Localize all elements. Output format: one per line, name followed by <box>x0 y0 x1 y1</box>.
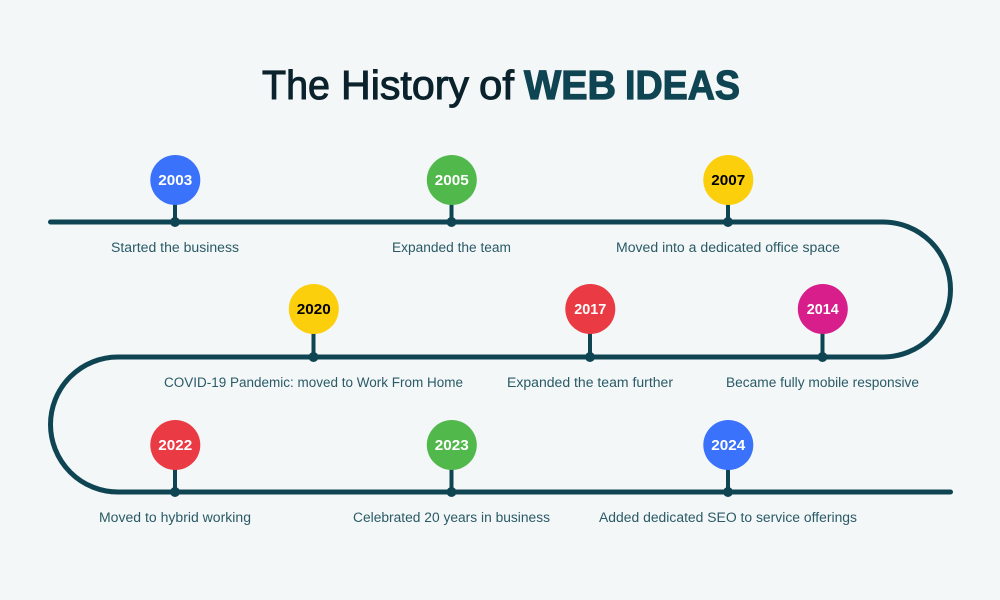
milestone: 2022: Moved to hybrid working <box>99 510 251 525</box>
milestone: 2007 <box>616 155 840 255</box>
title: WEB <box>524 62 616 108</box>
milestone: 2003 <box>111 155 239 255</box>
milestone: 2017 <box>507 284 674 390</box>
milestone: 2005: 2005 <box>435 173 469 189</box>
milestone: 2014: 2014 <box>807 302 839 318</box>
title: IDEAS <box>625 62 740 108</box>
milestone: 2022 <box>99 420 251 525</box>
milestone: 2022: 2022 <box>158 438 192 454</box>
milestone: 2020: COVID-19 Pandemic: moved to Work From Home <box>164 375 463 390</box>
milestone: 2005 <box>392 155 511 255</box>
milestone: 2005: Expanded the team <box>392 240 511 255</box>
timeline path <box>50 222 950 492</box>
milestone: 2007: 2007 <box>711 173 745 189</box>
title <box>262 62 740 108</box>
milestone: 2024: Added dedicated SEO to service offerings <box>599 510 857 525</box>
milestone: 2020: 2020 <box>297 302 331 318</box>
milestone: 2024: 2024 <box>711 438 745 454</box>
milestone: 2014: Became fully mobile responsive <box>726 375 919 390</box>
milestone: 2017: 2017 <box>574 302 606 318</box>
milestone: 2023: Celebrated 20 years in business <box>353 510 550 525</box>
milestone: 2007: Moved into a dedicated office space <box>616 240 840 255</box>
title: of <box>479 62 515 108</box>
milestone: 2023 <box>353 420 550 525</box>
milestone: 2003: Started the business <box>111 240 239 255</box>
title: The <box>262 62 330 108</box>
milestone: 2003: 2003 <box>158 173 192 189</box>
milestone: 2020 <box>164 284 463 390</box>
milestone: 2017: Expanded the team further <box>507 375 674 390</box>
title: History <box>341 62 469 108</box>
milestone: 2024 <box>599 420 857 525</box>
milestone: 2023: 2023 <box>435 438 469 454</box>
milestone: 2014 <box>726 284 919 390</box>
